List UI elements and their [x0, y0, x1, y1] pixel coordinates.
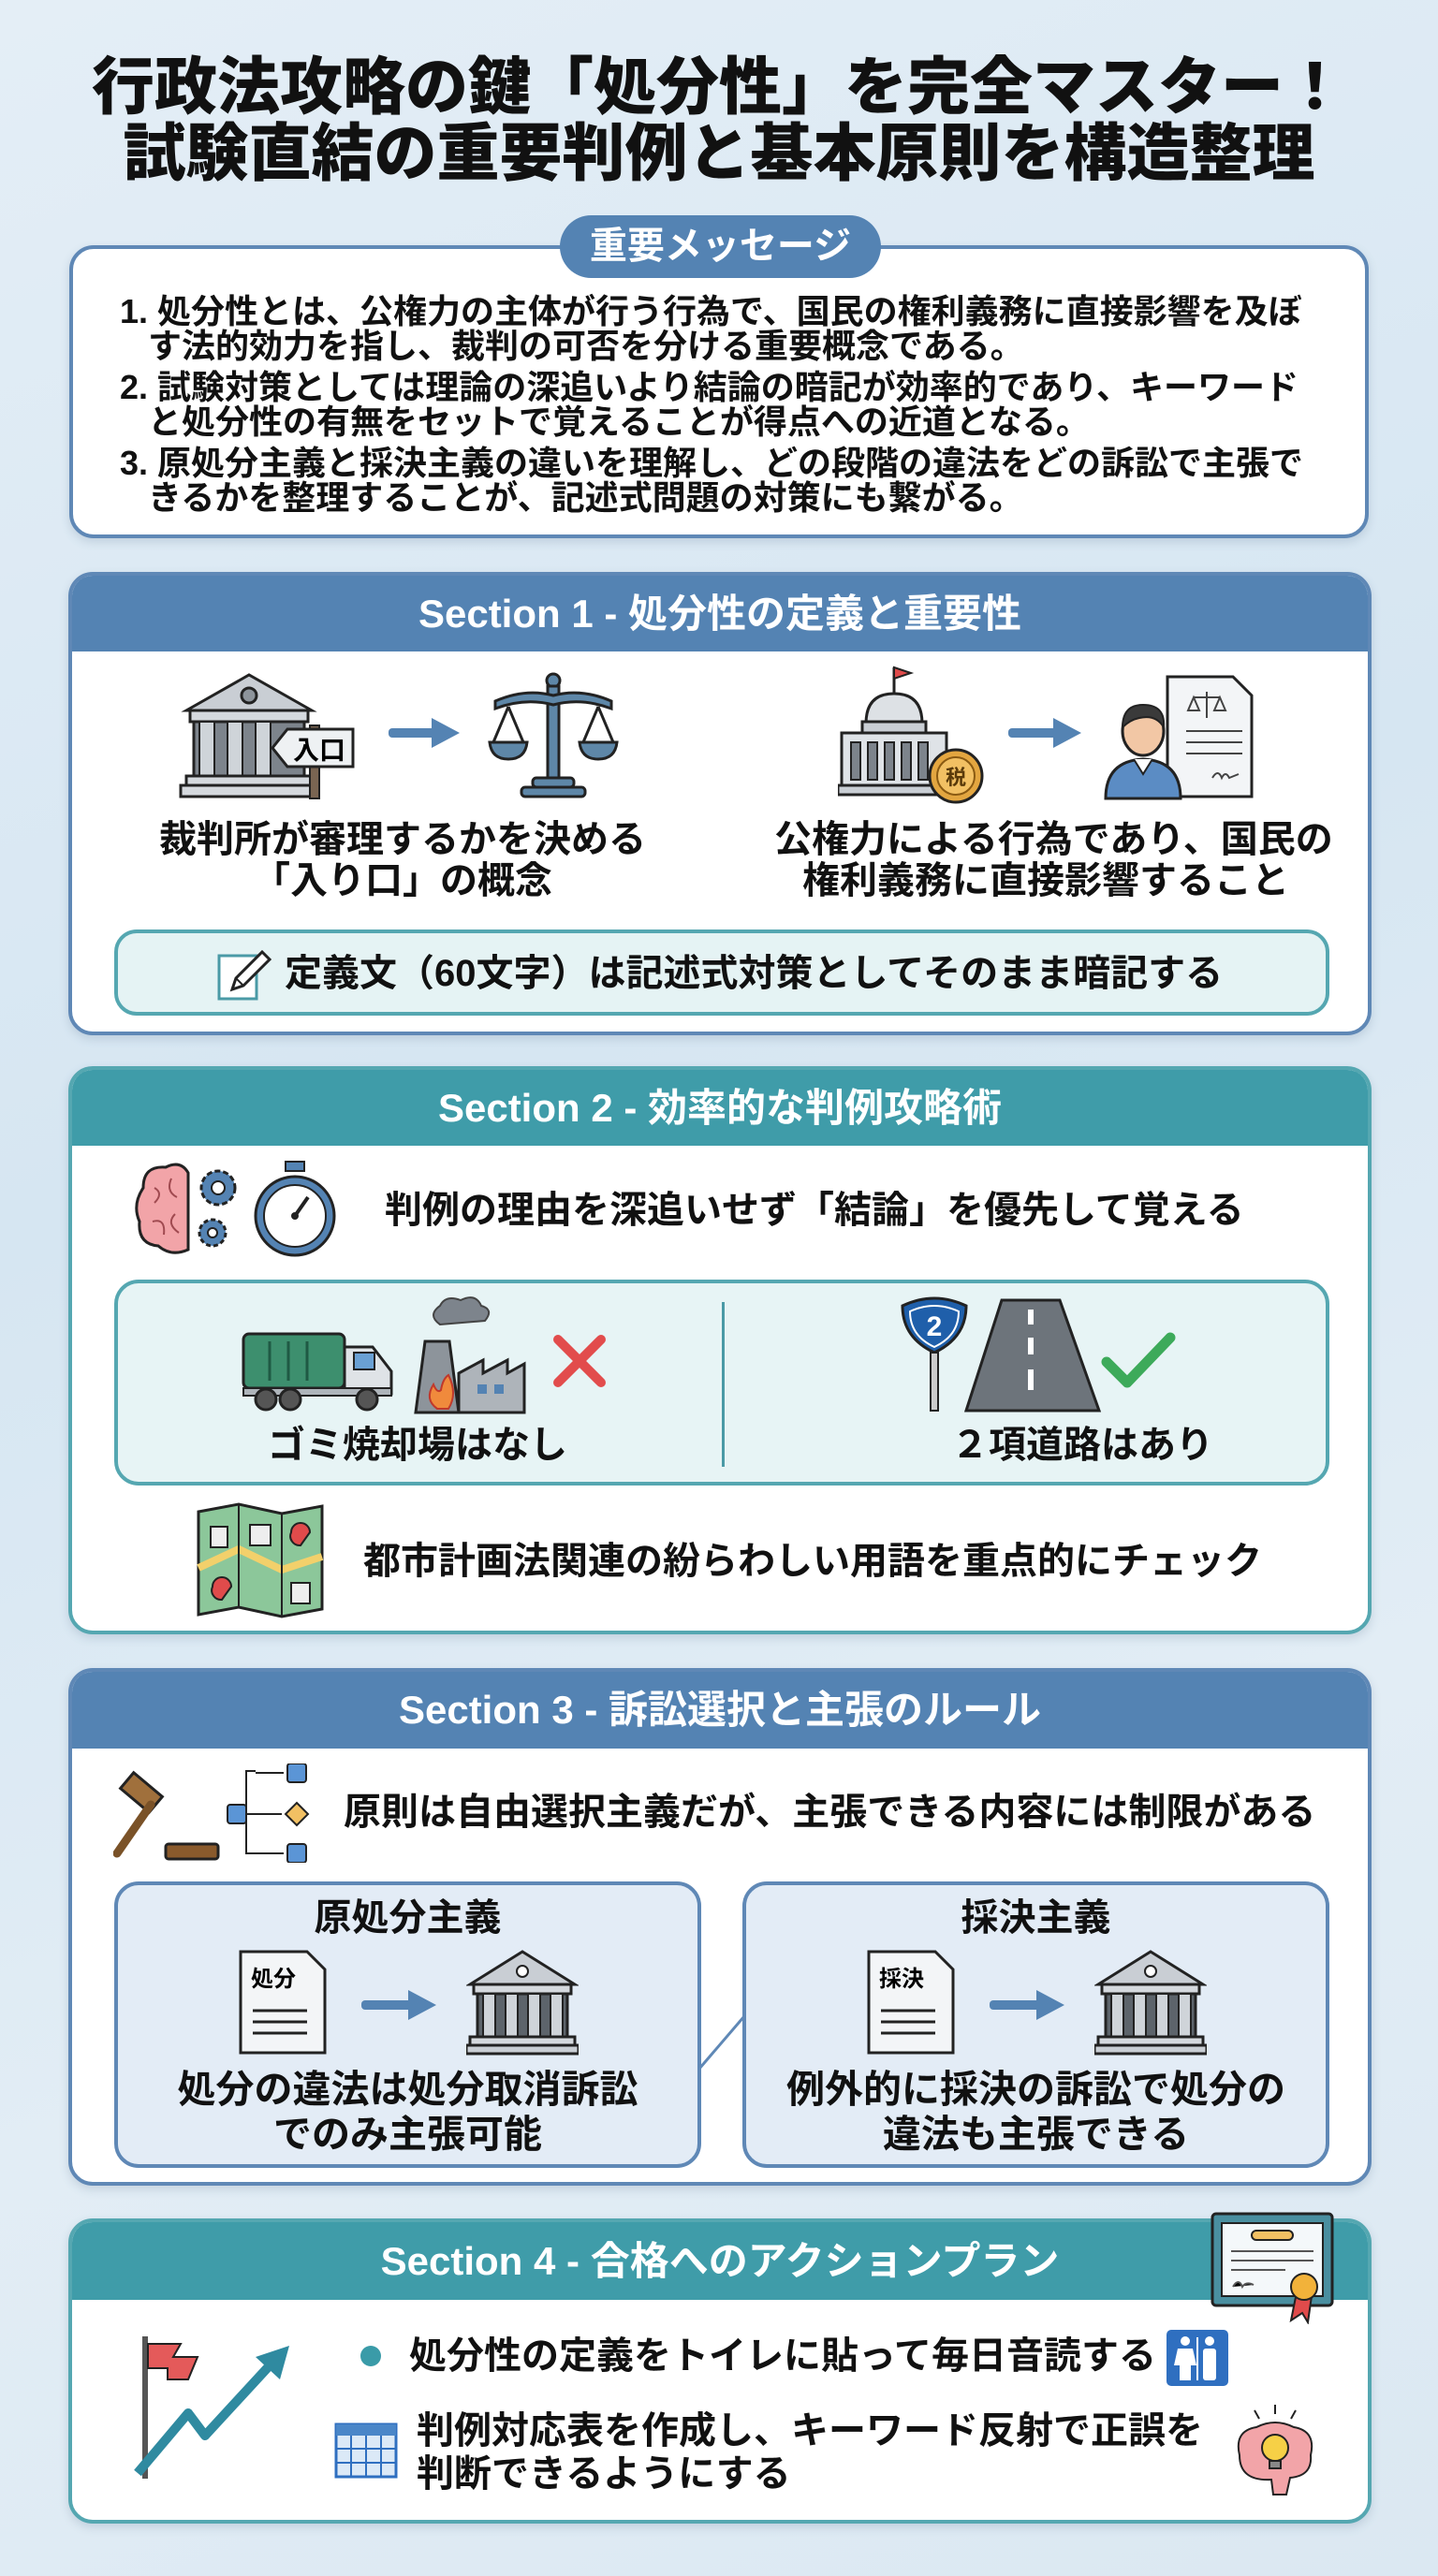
bullet item: read definition: 処分性の定義をトイレに貼って毎日音読する [409, 2335, 1156, 2377]
divider [722, 1302, 725, 1467]
panel: section 4 [68, 2218, 1372, 2524]
icon: route 2 road with check: 2 [927, 1311, 942, 1342]
text [786, 2068, 1285, 2156]
heading pill: key messages: 重要メッセージ [590, 226, 851, 267]
icon: citizen with legal document [1105, 676, 1253, 799]
text: entrance concept: 裁判所が審理するかを決める [159, 819, 646, 860]
heading pill: key messages [560, 215, 881, 278]
title: 行政法攻略の鍵「処分性」を完全マスター！ [92, 52, 1346, 123]
icon: adjudication document: 採決 [879, 1960, 924, 1993]
header: section 3: Section 3 - 訴訟選択と主張のルール [399, 1688, 1041, 1732]
arrow [1008, 718, 1081, 748]
bullet item: create case table: 判断できるようにする [417, 2453, 791, 2495]
icon: gavel and flowchart [113, 1764, 309, 1863]
message list: きるかを整理することが、記述式問題の対策にも繋がる。 [148, 478, 1023, 517]
icon: government building with coin: 税 [946, 761, 966, 791]
icon: disposition document: 処分 [251, 1960, 296, 1993]
panel: section 3 [68, 1668, 1372, 2186]
icon: brain, gears and stopwatch [135, 1161, 335, 1256]
callout text: 定義文（60文字）は記述式対策としてそのまま暗記する [285, 953, 1223, 994]
text: incinerator no: ゴミ焼却場はなし [268, 1425, 567, 1466]
text: public authority: 権利義務に直接影響すること [802, 860, 1289, 901]
message list: 2. 試験対策としては理論の深追いより結論の暗記が効率的であり、キーワード [120, 368, 1299, 406]
bullet item: create case table [417, 2410, 1203, 2495]
icon: scales of justice [488, 672, 619, 798]
text: city planning terms: 都市計画法関連の紛らわしい用語を重点的にチェック [363, 1541, 1262, 1582]
text: entrance concept: 「入り口」の概念 [253, 860, 552, 901]
message list: と処分性の有無をセットで覚えることが得点への近道となる。 [148, 402, 1090, 441]
icon: certificate [1211, 2213, 1333, 2324]
text: public authority: 公権力による行為であり、国民の [774, 819, 1333, 860]
callout: memorize definition [114, 929, 1329, 1016]
panel: key messages [69, 245, 1369, 538]
header: section 4 [72, 2222, 1368, 2300]
icon: adjudication document [867, 1951, 955, 2054]
message list: 1. 処分性とは、公権力の主体が行う行為で、国民の権利義務に直接影響を及ぼ [120, 292, 1302, 330]
header: section 4: Section 4 - 合格へのアクションプラン [381, 2239, 1059, 2283]
header: section 3 [72, 1672, 1368, 1749]
header: section 2 [72, 1070, 1368, 1146]
icon: table [335, 2422, 397, 2479]
text: でのみ主張可能 [273, 2113, 542, 2156]
header: section 1 [72, 576, 1368, 651]
sub-panel: original disposition principle [114, 1881, 701, 2168]
text: public authority [774, 819, 1333, 901]
arrow [990, 1990, 1064, 2020]
icon: court [466, 1950, 579, 2056]
icon: disposition document [240, 1951, 326, 2054]
text: 例外的に採決の訴訟で処分の [786, 2068, 1285, 2111]
icon: court with entrance sign [180, 673, 354, 799]
bullet item: create case table: 判例対応表を作成し、キーワード反射で正誤を [417, 2410, 1203, 2452]
arrow [361, 1990, 436, 2020]
icon: flag and rising arrow [134, 2336, 289, 2479]
title: 試験直結の重要判例と基本原則を構造整理 [124, 119, 1314, 189]
icon: court [1094, 1950, 1207, 2056]
text: prioritize conclusions: 判例の理由を深追いせず「結論」を優先して覚える [385, 1190, 1244, 1231]
panel: section 1 [68, 572, 1372, 1035]
text: entrance concept [159, 819, 646, 901]
icon: garbage truck and incinerator [242, 1296, 606, 1413]
icon: court with entrance sign: 入口 [293, 730, 345, 768]
heading: 採決主義 [961, 1897, 1110, 1939]
text: road yes: ２項道路はあり [951, 1425, 1213, 1466]
icon: brain with lightbulb [1238, 2405, 1313, 2496]
header: section 1: Section 1 - 処分性の定義と重要性 [418, 592, 1021, 636]
comparison box: incinerator vs road [114, 1280, 1329, 1486]
header: section 2: Section 2 - 効率的な判例攻略術 [438, 1086, 1002, 1130]
sub-panel: adjudication principle [742, 1881, 1329, 2168]
connector line [701, 2016, 742, 2069]
heading: 原処分主義 [315, 1897, 502, 1939]
message list: す法的効力を指し、裁判の可否を分ける重要概念である。 [148, 327, 1024, 365]
message list: 3. 原処分主義と採決主義の違いを理解し、どの段階の違法をどの訴訟で主張で [120, 444, 1303, 482]
text: free choice principle: 原則は自由選択主義だが、主張できる内容には制限がある [344, 1792, 1315, 1833]
panel: section 2 [68, 1066, 1372, 1634]
title [92, 52, 1346, 189]
icon: city map [197, 1503, 324, 1617]
text: 処分の違法は処分取消訴訟 [178, 2068, 638, 2111]
icon: route 2 road with check [901, 1297, 1176, 1412]
arrow [389, 718, 460, 748]
message list [120, 292, 1303, 517]
text [178, 2068, 638, 2156]
icon: government building with coin [838, 666, 983, 803]
text: 違法も主張できる [883, 2113, 1189, 2156]
icon: pencil [217, 950, 271, 1000]
icon: restroom [1167, 2330, 1228, 2386]
